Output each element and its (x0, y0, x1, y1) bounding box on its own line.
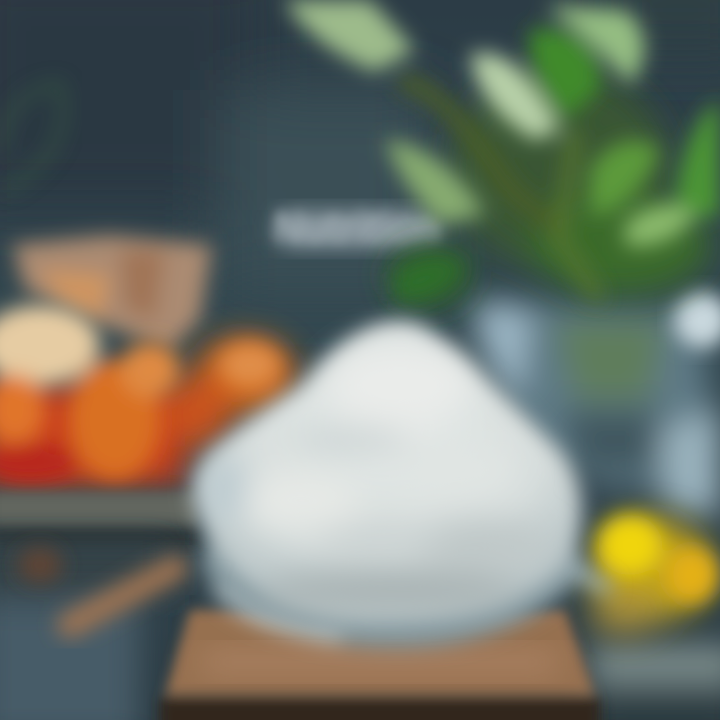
faint green leaf outline, top left (0, 85, 63, 190)
pastry / bread, upper left (12, 235, 212, 350)
wooden board (160, 610, 600, 720)
table surface (0, 545, 720, 720)
vase highlight (674, 292, 720, 348)
background shading (0, 0, 720, 290)
glass bowl rim (200, 530, 610, 648)
blurred label: Nutrition: Nutrition (274, 203, 440, 252)
plate under fruit (0, 492, 200, 548)
lemon slices (590, 515, 718, 635)
orange and red fruit (0, 305, 295, 485)
cinnamon stick (18, 547, 175, 625)
heap of white salt (195, 321, 582, 621)
glass vase (470, 300, 720, 515)
plant: stems and leaves (285, 0, 720, 305)
